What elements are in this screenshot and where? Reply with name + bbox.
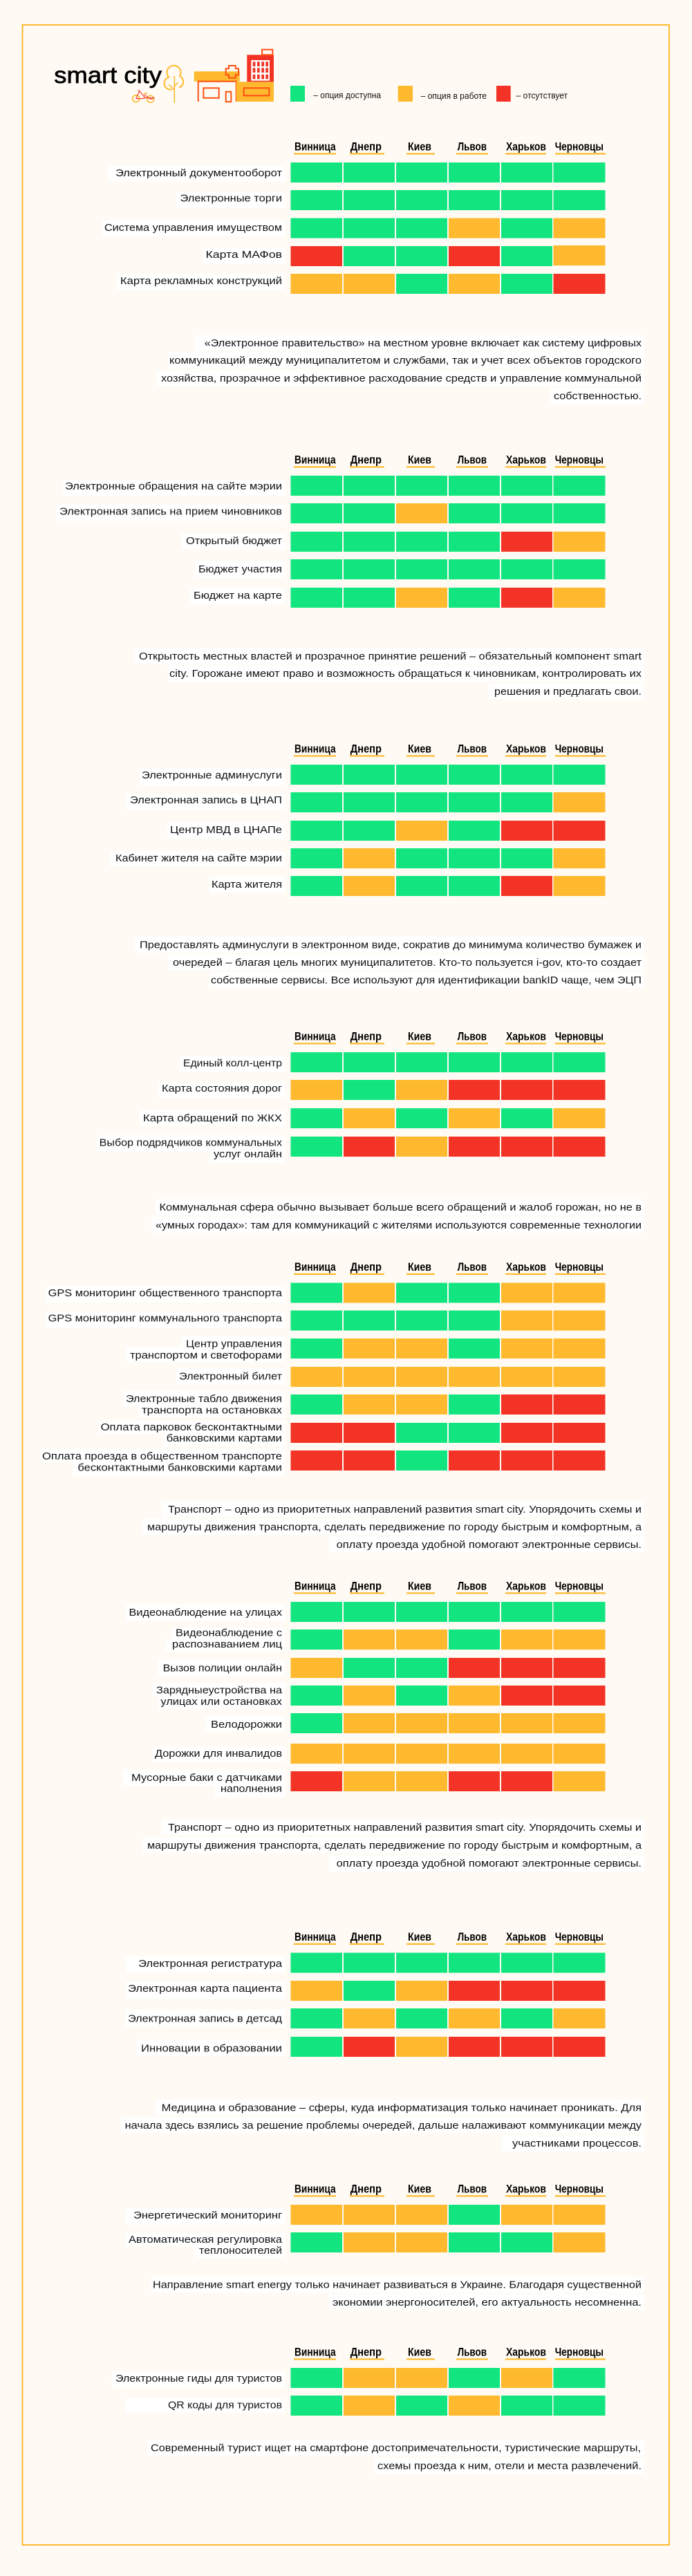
city headers: Львов (458, 1261, 487, 1273)
city headers (294, 2346, 606, 2360)
city headers: Харьков (506, 1030, 546, 1043)
text block 7 (121, 2100, 644, 2152)
row: Система управления имуществом: Система управления имуществом (104, 222, 282, 234)
row: Оплата парковок бесконтактными банковскими картами: Оплата парковок бесконтактными (101, 1421, 282, 1433)
city headers (294, 2183, 606, 2197)
city headers: Харьков (506, 743, 546, 755)
text block 3: Предоставлять админуслуги в электронном виде, сократив до минимума количество бумажек и (140, 939, 642, 951)
city headers: Львов (458, 1580, 487, 1592)
text block 4: Коммунальная сфера обычно вызывает больше всего обращений и жалоб горожан, но не в (159, 1202, 642, 1213)
city headers: Днепр (350, 140, 382, 153)
row: Система управления имуществом (102, 218, 606, 238)
city headers: Черновцы (555, 1931, 604, 1943)
row: Электронные торги (176, 190, 606, 210)
city headers: Львов (458, 743, 487, 755)
row: Электронные торги: Электронные торги (180, 192, 282, 205)
legend: in progress (398, 86, 487, 102)
text block 6: оплату проезда удобной помогают электронные сервисы. (337, 1858, 642, 1869)
row: GPS мониторинг коммунального транспорта: GPS мониторинг коммунального транспорта (48, 1312, 283, 1325)
city headers (294, 140, 606, 155)
row: Центр управления транспортом и светофорами: Центр управления (186, 1338, 282, 1350)
text block 6 (142, 1820, 644, 1871)
city headers: Днепр (350, 454, 382, 466)
city headers: Черновцы (555, 1261, 604, 1273)
row: Электронный документооборот (108, 162, 606, 183)
row: Электронная карта пациента (126, 1981, 606, 2001)
row: Оплата проезда в общественном транспорте бесконтактными банковскими картами: Оплата проезда в общественном транспорте (42, 1450, 282, 1462)
city headers: Днепр (350, 1931, 382, 1943)
header: logo and legend (54, 50, 568, 103)
city headers: Винница (294, 1931, 336, 1943)
row: Инновации в образовании: Инновации в образовании (141, 2043, 282, 2055)
row: Электронные табло движения транспорта на остановках: транспорта на остановках (142, 1405, 283, 1417)
city headers (294, 1261, 606, 1275)
text block 5: маршруты движения транспорта, сделать передвижение по городу быстрым и комфортным, а (147, 1522, 642, 1533)
row: GPS мониторинг общественного транспорта (46, 1283, 606, 1303)
city headers: Черновцы (555, 1580, 604, 1592)
row: Электронные обращения на сайте мэрии (63, 476, 606, 496)
row: GPS мониторинг коммунального транспорта (46, 1311, 606, 1330)
text block 7: Медицина и образование – сферы, куда информатизация только начинает проникать. Для (162, 2102, 642, 2114)
city headers: Киев (408, 454, 431, 466)
row: Карта МАФов: Карта МАФов (206, 249, 282, 261)
row: Видеонаблюдение на улицах: Видеонаблюдение на улицах (129, 1607, 283, 1618)
row: Автоматическая регулировка теплоносителей (125, 2232, 606, 2258)
row: Электронный документооборот: Электронный документооборот (115, 167, 282, 179)
city headers: Черновцы (555, 2346, 604, 2358)
row: Энергетический мониторинг (125, 2205, 606, 2225)
text block 8: экономии энергоносителей, его актуальность несомненна. (333, 2297, 642, 2308)
city headers: Днепр (350, 1261, 382, 1273)
city headers (294, 1030, 606, 1044)
text block 8: Направление smart energy только начинает развиваться в Украине. Благодаря существенной (153, 2279, 642, 2291)
row: Оплата парковок бесконтактными банковскими картами (98, 1421, 606, 1446)
row: Центр управления транспортом и светофорами: транспортом и светофорами (130, 1350, 282, 1361)
city headers: Черновцы (555, 743, 604, 755)
text block 1: «Электронное правительство» на местном уровне включает как систему цифровых (205, 337, 642, 349)
city headers: Днепр (350, 1580, 382, 1592)
row: QR коды для туристов: QR коды для туристов (168, 2399, 282, 2411)
row: Зарядныеустройства на улицах или остановках (153, 1683, 606, 1710)
city headers: Львов (458, 140, 487, 153)
row: Мусорные баки с датчиками наполнения (123, 1770, 606, 1798)
row: Электронная запись в детсад: Электронная запись в детсад (128, 2013, 282, 2024)
city headers: Киев (408, 1580, 431, 1592)
city headers: Киев (408, 743, 431, 755)
row: Электронные гиды для туристов: Электронные гиды для туристов (115, 2373, 282, 2384)
table 4: utilities (97, 1030, 606, 1163)
row: Центр МВД в ЦНАПе: Центр МВД в ЦНАПе (170, 824, 282, 836)
row: Бюджет на карте: Бюджет на карте (194, 590, 282, 601)
city headers: Киев (408, 1261, 431, 1273)
row: Электронные обращения на сайте мэрии: Электронные обращения на сайте мэрии (65, 480, 282, 492)
city headers: Харьков (506, 2346, 546, 2358)
table 2: openness (56, 454, 606, 608)
row: Мусорные баки с датчиками наполнения: наполнения (221, 1783, 282, 1795)
city headers: Днепр (350, 1030, 382, 1043)
text block 1 (157, 335, 644, 404)
text block 7: участниками процессов. (512, 2138, 642, 2149)
legend: available (290, 86, 381, 102)
row: QR коды для туристов (125, 2396, 606, 2416)
city headers: Харьков (506, 1931, 546, 1943)
row: Зарядныеустройства на улицах или остановках: Зарядныеустройства на (156, 1684, 283, 1697)
row: Электронная запись на прием чиновников (56, 503, 606, 523)
row: Автоматическая регулировка теплоносителей: теплоносителей (199, 2245, 282, 2257)
row: Зарядныеустройства на улицах или остановках: улицах или остановках (160, 1696, 283, 1708)
row: Карта состояния дорог: Карта состояния дорог (162, 1083, 283, 1094)
row: Кабинет жителя на сайте мэрии (110, 848, 606, 868)
city headers: Львов (458, 454, 487, 466)
table 9: tourism (112, 2346, 606, 2416)
legend: in progress: – опция в работе (421, 91, 487, 101)
row: Видеонаблюдение с распознаванием лиц: распознаванием лиц (172, 1639, 282, 1650)
legend: absent (496, 86, 568, 102)
row: Электронная регистратура (126, 1952, 606, 1973)
row: Электронная регистратура: Электронная регистратура (138, 1958, 283, 1970)
row: Энергетический мониторинг: Энергетический мониторинг (133, 2210, 283, 2221)
city headers: Киев (408, 1030, 431, 1043)
row: Оплата парковок бесконтактными банковскими картами: банковскими картами (167, 1432, 282, 1444)
legend: available: – опция доступна (313, 91, 381, 100)
row: Выбор подрядчиков коммунальных услуг онлайн (97, 1135, 606, 1163)
row: Оплата проезда в общественном транспорте бесконтактными банковскими картами: бесконтактными банковскими картами (77, 1462, 282, 1473)
legend: absent: – отсутствует (516, 91, 568, 101)
row: Видеонаблюдение с распознаванием лиц: Видеонаблюдение с (176, 1627, 283, 1639)
table 8: energy (125, 2183, 606, 2258)
row: Электронная запись в ЦНАП: Электронная запись в ЦНАП (130, 794, 282, 806)
row: Электронная карта пациента: Электронная карта пациента (128, 1983, 283, 1995)
city headers: Львов (458, 1030, 487, 1043)
row: Дорожки для инвалидов (153, 1744, 606, 1764)
row: Карта рекламных конструкций (117, 274, 606, 294)
text block 5 (142, 1502, 644, 1553)
text block 6: маршруты движения транспорта, сделать передвижение по городу быстрым и комфортным, а (147, 1840, 642, 1851)
city headers: Харьков (506, 1580, 546, 1592)
city headers: Днепр (350, 2183, 382, 2195)
city headers: Винница (294, 743, 336, 755)
text block 2: Открытость местных властей и прозрачное принятие решений – обязательный компонент smart (139, 651, 642, 662)
row: Инновации в образовании (137, 2037, 606, 2057)
row: Электронный билет: Электронный билет (179, 1371, 282, 1383)
row: Электронные админуслуги (140, 765, 606, 785)
city headers (294, 1580, 606, 1594)
text block 5: Транспорт – одно из приоритетных направлений развития smart city. Упорядочить схемы и (168, 1504, 642, 1515)
city headers: Львов (458, 2183, 487, 2195)
city headers: Винница (294, 2183, 336, 2195)
table 1: e-government (102, 140, 606, 294)
text block 6: Транспорт – одно из приоритетных направлений развития smart city. Упорядочить схемы и (168, 1822, 642, 1833)
text block 1: хозяйства, прозрачное и эффективное расходование средств и управление коммунальной (161, 373, 642, 384)
city headers: Львов (458, 1931, 487, 1943)
row: Карта жителя: Карта жителя (212, 879, 282, 890)
row: Открытый бюджет (181, 532, 606, 552)
city headers: Киев (408, 1931, 431, 1943)
city headers: Винница (294, 1030, 336, 1043)
text block 9: схемы проезда к ним, отели и места развлечений. (377, 2460, 642, 2472)
icon: tree (165, 66, 183, 103)
row: Открытый бюджет: Открытый бюджет (186, 535, 282, 547)
row: Бюджет участия: Бюджет участия (198, 563, 282, 575)
city headers: Винница (294, 1580, 336, 1592)
icon: city building (194, 50, 274, 102)
city headers: Харьков (506, 140, 546, 153)
row: Карта состояния дорог (158, 1080, 606, 1100)
row: Велодорожки: Велодорожки (211, 1719, 282, 1730)
city headers: Киев (408, 2183, 431, 2195)
row: Электронный билет (176, 1367, 606, 1387)
row: Единый колл-центр: Единый колл-центр (183, 1058, 282, 1070)
row: Электронная запись в ЦНАП (126, 792, 606, 812)
table 6: safety and city infrastructure (123, 1580, 606, 1798)
city headers: Черновцы (555, 2183, 604, 2195)
row: Электронные гиды для туристов (112, 2368, 606, 2388)
text block 4: «умных городах»: там для коммуникаций с жителями используются современные технологии (156, 1220, 642, 1231)
text block 5: оплату проезда удобной помогают электронные сервисы. (337, 1539, 642, 1551)
row: Бюджет на карте (190, 588, 606, 608)
row: Карта МАФов (203, 245, 606, 266)
city headers: Харьков (506, 2183, 546, 2195)
city headers: Днепр (350, 743, 382, 755)
row: Центр управления транспортом и светофорами (126, 1336, 606, 1362)
text block 2 (134, 648, 644, 700)
city headers: Киев (408, 140, 431, 153)
text block 1: коммуникаций между муниципалитетом и службами, так и учет всех объектов городского (169, 355, 642, 366)
row: Электронные табло движения транспорта на остановках: Электронные табло движения (126, 1393, 282, 1405)
table 5: transport (41, 1261, 606, 1476)
row: Карта рекламных конструкций: Карта рекламных конструкций (120, 275, 282, 287)
city headers: Винница (294, 454, 336, 466)
row: Единый колл-центр (180, 1052, 606, 1072)
city headers: Винница (294, 140, 336, 153)
row: Оплата проезда в общественном транспорте бесконтактными банковскими картами (41, 1449, 605, 1476)
row: Видеонаблюдение с распознаванием лиц (166, 1627, 606, 1652)
row: Дорожки для инвалидов: Дорожки для инвалидов (155, 1748, 282, 1760)
text block 3 (135, 937, 644, 988)
text block 7: начала здесь взялись за решение проблемы очередей, дальше налаживают коммуникации между (125, 2120, 642, 2131)
city headers: Черновцы (555, 140, 604, 153)
row: Электронные админуслуги: Электронные админуслуги (142, 769, 282, 781)
city headers: Днепр (350, 2346, 382, 2358)
row: Выбор подрядчиков коммунальных услуг онлайн: Выбор подрядчиков коммунальных (100, 1137, 283, 1149)
city headers (294, 454, 606, 467)
row: Вызов полиции онлайн (158, 1658, 606, 1678)
city headers: Львов (458, 2346, 487, 2358)
city headers: Черновцы (555, 1030, 604, 1043)
row: Велодорожки (206, 1713, 606, 1733)
text block 1: собственностью. (554, 391, 642, 402)
text block 3: собственные сервисы. Все используют для идентификации bankID чаще, чем ЭЦП (211, 975, 642, 986)
row: Автоматическая регулировка теплоносителей: Автоматическая регулировка (129, 2234, 283, 2246)
text block 2: city. Горожане имеют право и возможность обращаться к чиновникам, контролировать их (169, 668, 642, 680)
row: Карта обращений по ЖКХ (140, 1108, 606, 1128)
row: Вызов полиции онлайн: Вызов полиции онлайн (163, 1663, 282, 1674)
city headers: Винница (294, 2346, 336, 2358)
row: Карта жителя (209, 876, 606, 896)
text block 2: решения и предлагать свои. (494, 686, 642, 698)
title: smart city: smart city (54, 62, 162, 88)
city headers (294, 1931, 606, 1945)
city headers (294, 743, 606, 756)
city headers: Харьков (506, 1261, 546, 1273)
text block 4 (151, 1199, 644, 1233)
city headers: Черновцы (555, 454, 604, 466)
row: Электронная запись в детсад (125, 2008, 606, 2028)
row: Выбор подрядчиков коммунальных услуг онлайн: услуг онлайн (214, 1148, 282, 1160)
row: Электронная запись на прием чиновников: Электронная запись на прием чиновников (59, 506, 282, 518)
icon: bicycle (133, 90, 154, 102)
row: Видеонаблюдение на улицах (126, 1602, 606, 1622)
row: Мусорные баки с датчиками наполнения: Мусорные баки с датчиками (131, 1772, 282, 1784)
city headers: Винница (294, 1261, 336, 1273)
city headers: Киев (408, 2346, 431, 2358)
row: Бюджет участия (194, 559, 606, 579)
table 7: medicine and education (125, 1931, 606, 2057)
text block 3: очередей – благая цель многих муниципалитетов. Кто-то пользуется i-gov, кто-то создает (173, 957, 642, 969)
city headers: Харьков (506, 454, 546, 466)
row: Кабинет жителя на сайте мэрии: Кабинет жителя на сайте мэрии (115, 852, 282, 864)
text block 9 (147, 2440, 644, 2474)
table 3: administrative services (110, 743, 606, 896)
text block 8 (151, 2277, 644, 2311)
row: Центр МВД в ЦНАПе (167, 821, 606, 841)
text block 9: Современный турист ищет на смартфоне достопримечательности, туристические маршруты, (151, 2443, 641, 2454)
row: Карта обращений по ЖКХ: Карта обращений по ЖКХ (143, 1112, 282, 1124)
row: GPS мониторинг общественного транспорта: GPS мониторинг общественного транспорта (48, 1287, 283, 1299)
row: Электронные табло движения транспорта на остановках (123, 1391, 606, 1417)
